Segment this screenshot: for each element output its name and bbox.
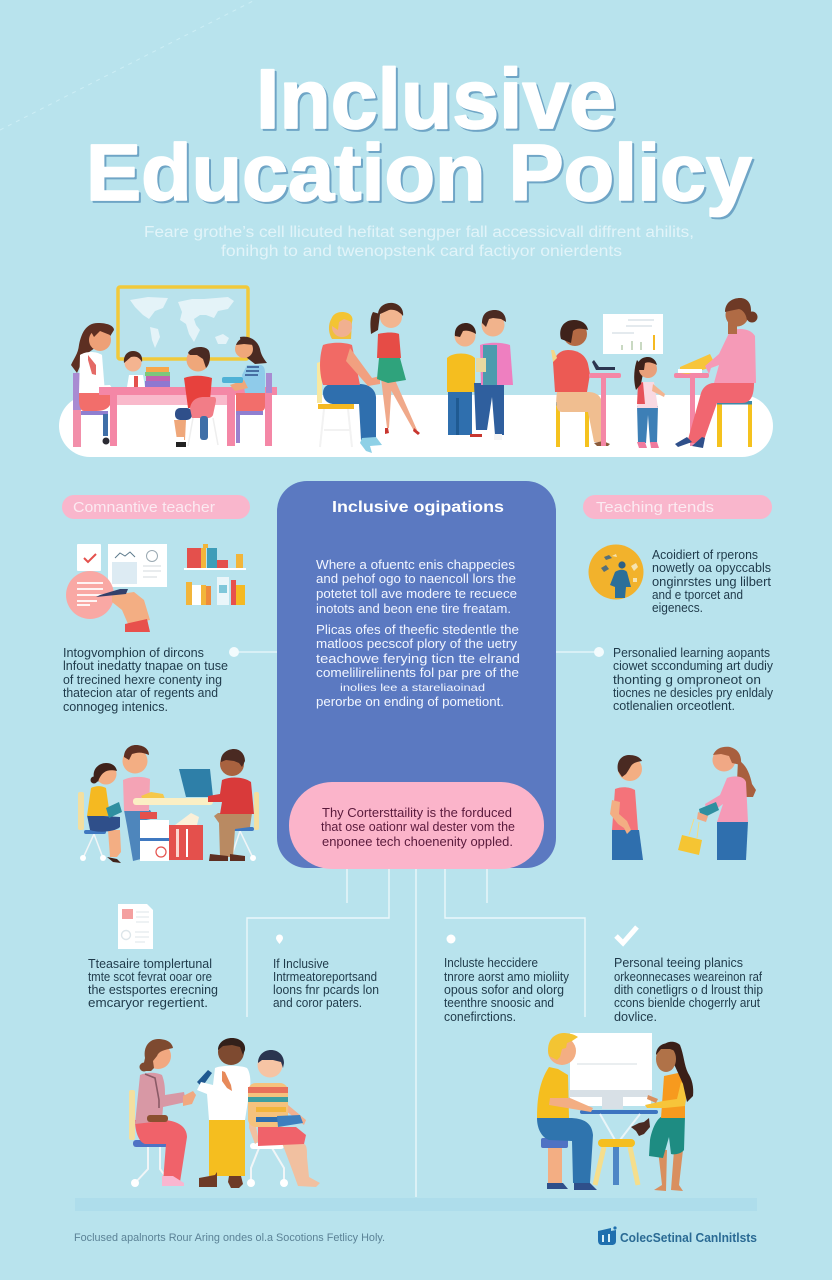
woman: [737, 760, 756, 797]
right lower text: ciowet scconduming art dudiy: [613, 659, 774, 673]
right upper text: [652, 548, 772, 615]
right lower text: tiocnes ne desicles pry enldaly: [613, 686, 774, 700]
man: [323, 384, 376, 440]
right upper text: onginrstes ung lilbert: [652, 575, 772, 589]
pink callout: Thy Cortersttaility is the forduced: [322, 806, 512, 820]
footer band: [75, 1198, 757, 1211]
bottom left illustration: [129, 1038, 320, 1188]
panel paragraph two: matloos pecscof plory of the uetry: [316, 637, 518, 651]
title: Education Policy: [88, 130, 755, 219]
footer logo: ColecSetinal Canlnitlsts: [620, 1231, 757, 1245]
bottom text one: the estsportes erecning: [88, 983, 218, 997]
table: [580, 1110, 658, 1114]
panel paragraph two: comelilireliinents fol par pre of the: [316, 666, 519, 680]
panel paragraph two: inolies lee a stareliaoinad: [340, 683, 485, 694]
man: [548, 1148, 562, 1185]
subtitle: Feare grothe’s cell llicuted hefitat sengper fall accessicvall diffrent ahilits,: [144, 224, 694, 241]
girl: [381, 378, 417, 431]
title: Inclusive: [256, 52, 616, 146]
bottom text one: Tteasaire tomplertunal: [88, 957, 212, 971]
woman with chair: [129, 1090, 135, 1140]
girl: [108, 830, 121, 857]
panel paragraph two: perorbe on ending of pometiont.: [316, 695, 504, 709]
left group illustration: [78, 745, 259, 863]
title: Education Policy: [86, 128, 753, 217]
icon: document and writing hand: [66, 544, 167, 632]
bottom text three: conefirctions.: [444, 1010, 516, 1024]
bottom right illustration: [537, 1033, 693, 1191]
seated kid: [251, 1148, 284, 1183]
little girl standing: [634, 357, 665, 448]
right lower text: Personalied learning aopants: [613, 646, 770, 660]
world map board: [118, 287, 248, 359]
boy: [612, 830, 643, 860]
bottom text three: tnrore aorst amo mioliity: [444, 970, 570, 984]
group at table: [71, 323, 277, 447]
seated man and girl: [317, 303, 420, 453]
laptop: [179, 769, 213, 797]
bottom text four: dith conetligrs o d lroust thip: [614, 983, 763, 997]
central panel: [277, 481, 556, 869]
girl: [654, 1150, 683, 1191]
right lower text: thonting g omproneot on: [613, 673, 761, 687]
subtitle: fonihgh to and twenopstenk card factiyor onierdents: [221, 243, 622, 260]
left pill heading: [62, 495, 250, 519]
bottom text two: and coror paters.: [273, 996, 362, 1010]
left text block: [63, 646, 228, 714]
pink callout: [289, 782, 544, 869]
icon: person with floating ideas: [588, 544, 644, 600]
table: [99, 387, 277, 395]
bottom text three: teenthre snoosic and: [444, 996, 554, 1010]
monitor: [570, 1033, 652, 1090]
left pill heading: Comnantive teacher: [73, 499, 215, 516]
left text block: Intogvomphion of dircons: [63, 646, 204, 660]
bottom text two: [273, 957, 379, 1010]
bottom text one: tmte scot fevrat ooar ore: [88, 970, 212, 984]
table: [133, 798, 213, 805]
bottom text three: [444, 956, 570, 1024]
panel paragraph one: inotots and beon ene tire freatam.: [316, 602, 511, 616]
left text block: lnfout inedatty tnapae on tuse: [63, 659, 228, 673]
small child: [127, 375, 145, 387]
bottom text one: emcaryor regertient.: [88, 996, 208, 1010]
bottom text two: Intrmeatoreportsand: [273, 970, 377, 984]
teacher with book: [674, 298, 758, 448]
title: Inclusive: [258, 54, 618, 148]
left text block: thatecion atar of regents and: [63, 686, 218, 700]
boy pink: [474, 383, 504, 435]
right upper text: eigenecs.: [652, 601, 703, 615]
two standing boys: [447, 310, 513, 440]
bottom text four: Personal teeing planics: [614, 956, 743, 970]
seated student at laptop: [551, 320, 621, 447]
pink callout: enponee tech choenenity oppled.: [322, 835, 513, 849]
bottom text three: Incluste heccidere: [444, 956, 538, 970]
panel paragraph one: potetet toll ave modere te recuece: [316, 587, 517, 601]
right figures illustration: [610, 747, 756, 860]
top classroom illustration: [59, 287, 773, 457]
icon: drop: [276, 934, 283, 944]
right pill heading: [583, 495, 772, 519]
right pill heading: Teaching rtends: [596, 499, 714, 516]
right upper text: Acoidiert of rperons: [652, 548, 758, 562]
bottom text one: [88, 957, 218, 1010]
bottom text two: loons fnr pcards lon: [273, 983, 379, 997]
panel paragraph two: Plicas ofes of theefic stedentle the: [316, 623, 519, 637]
connector lines: [247, 868, 585, 1197]
dark pet: [631, 1118, 650, 1136]
pink callout: that ose oationr wal dester vom the: [321, 820, 515, 834]
left text block: connogeg intenics.: [63, 700, 168, 714]
panel paragraph two: [316, 623, 520, 709]
yellow stool: [595, 1147, 638, 1185]
child's chair: [188, 397, 218, 446]
icon: dot: [446, 934, 456, 944]
chart board: [603, 314, 663, 354]
boxes: [140, 820, 169, 861]
microphone: [197, 1070, 212, 1087]
panel paragraph one: Where a ofuentc enis chappecies: [316, 558, 515, 572]
bottom text two: If Inclusive: [273, 957, 329, 971]
icon: document: [118, 904, 153, 949]
child in red: [175, 408, 192, 420]
right lower text: cotlenalien orceotlent.: [613, 699, 735, 713]
panel heading: Inclusive ogipations: [332, 499, 504, 516]
panel paragraph one: [316, 558, 517, 616]
right connector: [556, 647, 604, 657]
left connector: [229, 647, 277, 657]
man's chair: [317, 361, 322, 403]
left text block: of trecined hexre conenty ing: [63, 673, 222, 687]
bottom text four: dovlice.: [614, 1010, 657, 1024]
man: [254, 792, 259, 830]
bottom text four: orkeonnecases weareinon raf: [614, 970, 762, 984]
book stack: [145, 367, 170, 387]
teacher left: [73, 373, 81, 411]
bottom text four: [614, 956, 763, 1024]
title: [86, 52, 755, 219]
girl right: [240, 337, 267, 364]
chairs: [78, 792, 84, 830]
bottom text three: opous sofor and olorg: [444, 983, 564, 997]
footer logo: [598, 1226, 757, 1245]
right upper text: nowetly oa opyccabls: [652, 561, 771, 575]
boy: [124, 810, 155, 861]
panel paragraph one: and pehof ogo to naencoll lors the: [316, 572, 516, 586]
panel paragraph two: teachowe ferying ticn tte elrand: [316, 652, 520, 666]
right lower text: [613, 646, 774, 713]
white floor band: [59, 395, 773, 457]
icon: book shelves: [184, 544, 246, 605]
boy with tie: [209, 1120, 245, 1176]
bottom text four: ccons bienlde chogerrly arut: [614, 996, 760, 1010]
subtitle: [144, 224, 694, 260]
boy yellow: [448, 392, 472, 435]
footer note: Foclused apalnorts Rour Aring ondes ol.a Socotions Fetlicy Holy.: [74, 1232, 385, 1244]
right upper text: and e tporcet and: [652, 588, 743, 602]
icon: check mark: [616, 927, 637, 943]
